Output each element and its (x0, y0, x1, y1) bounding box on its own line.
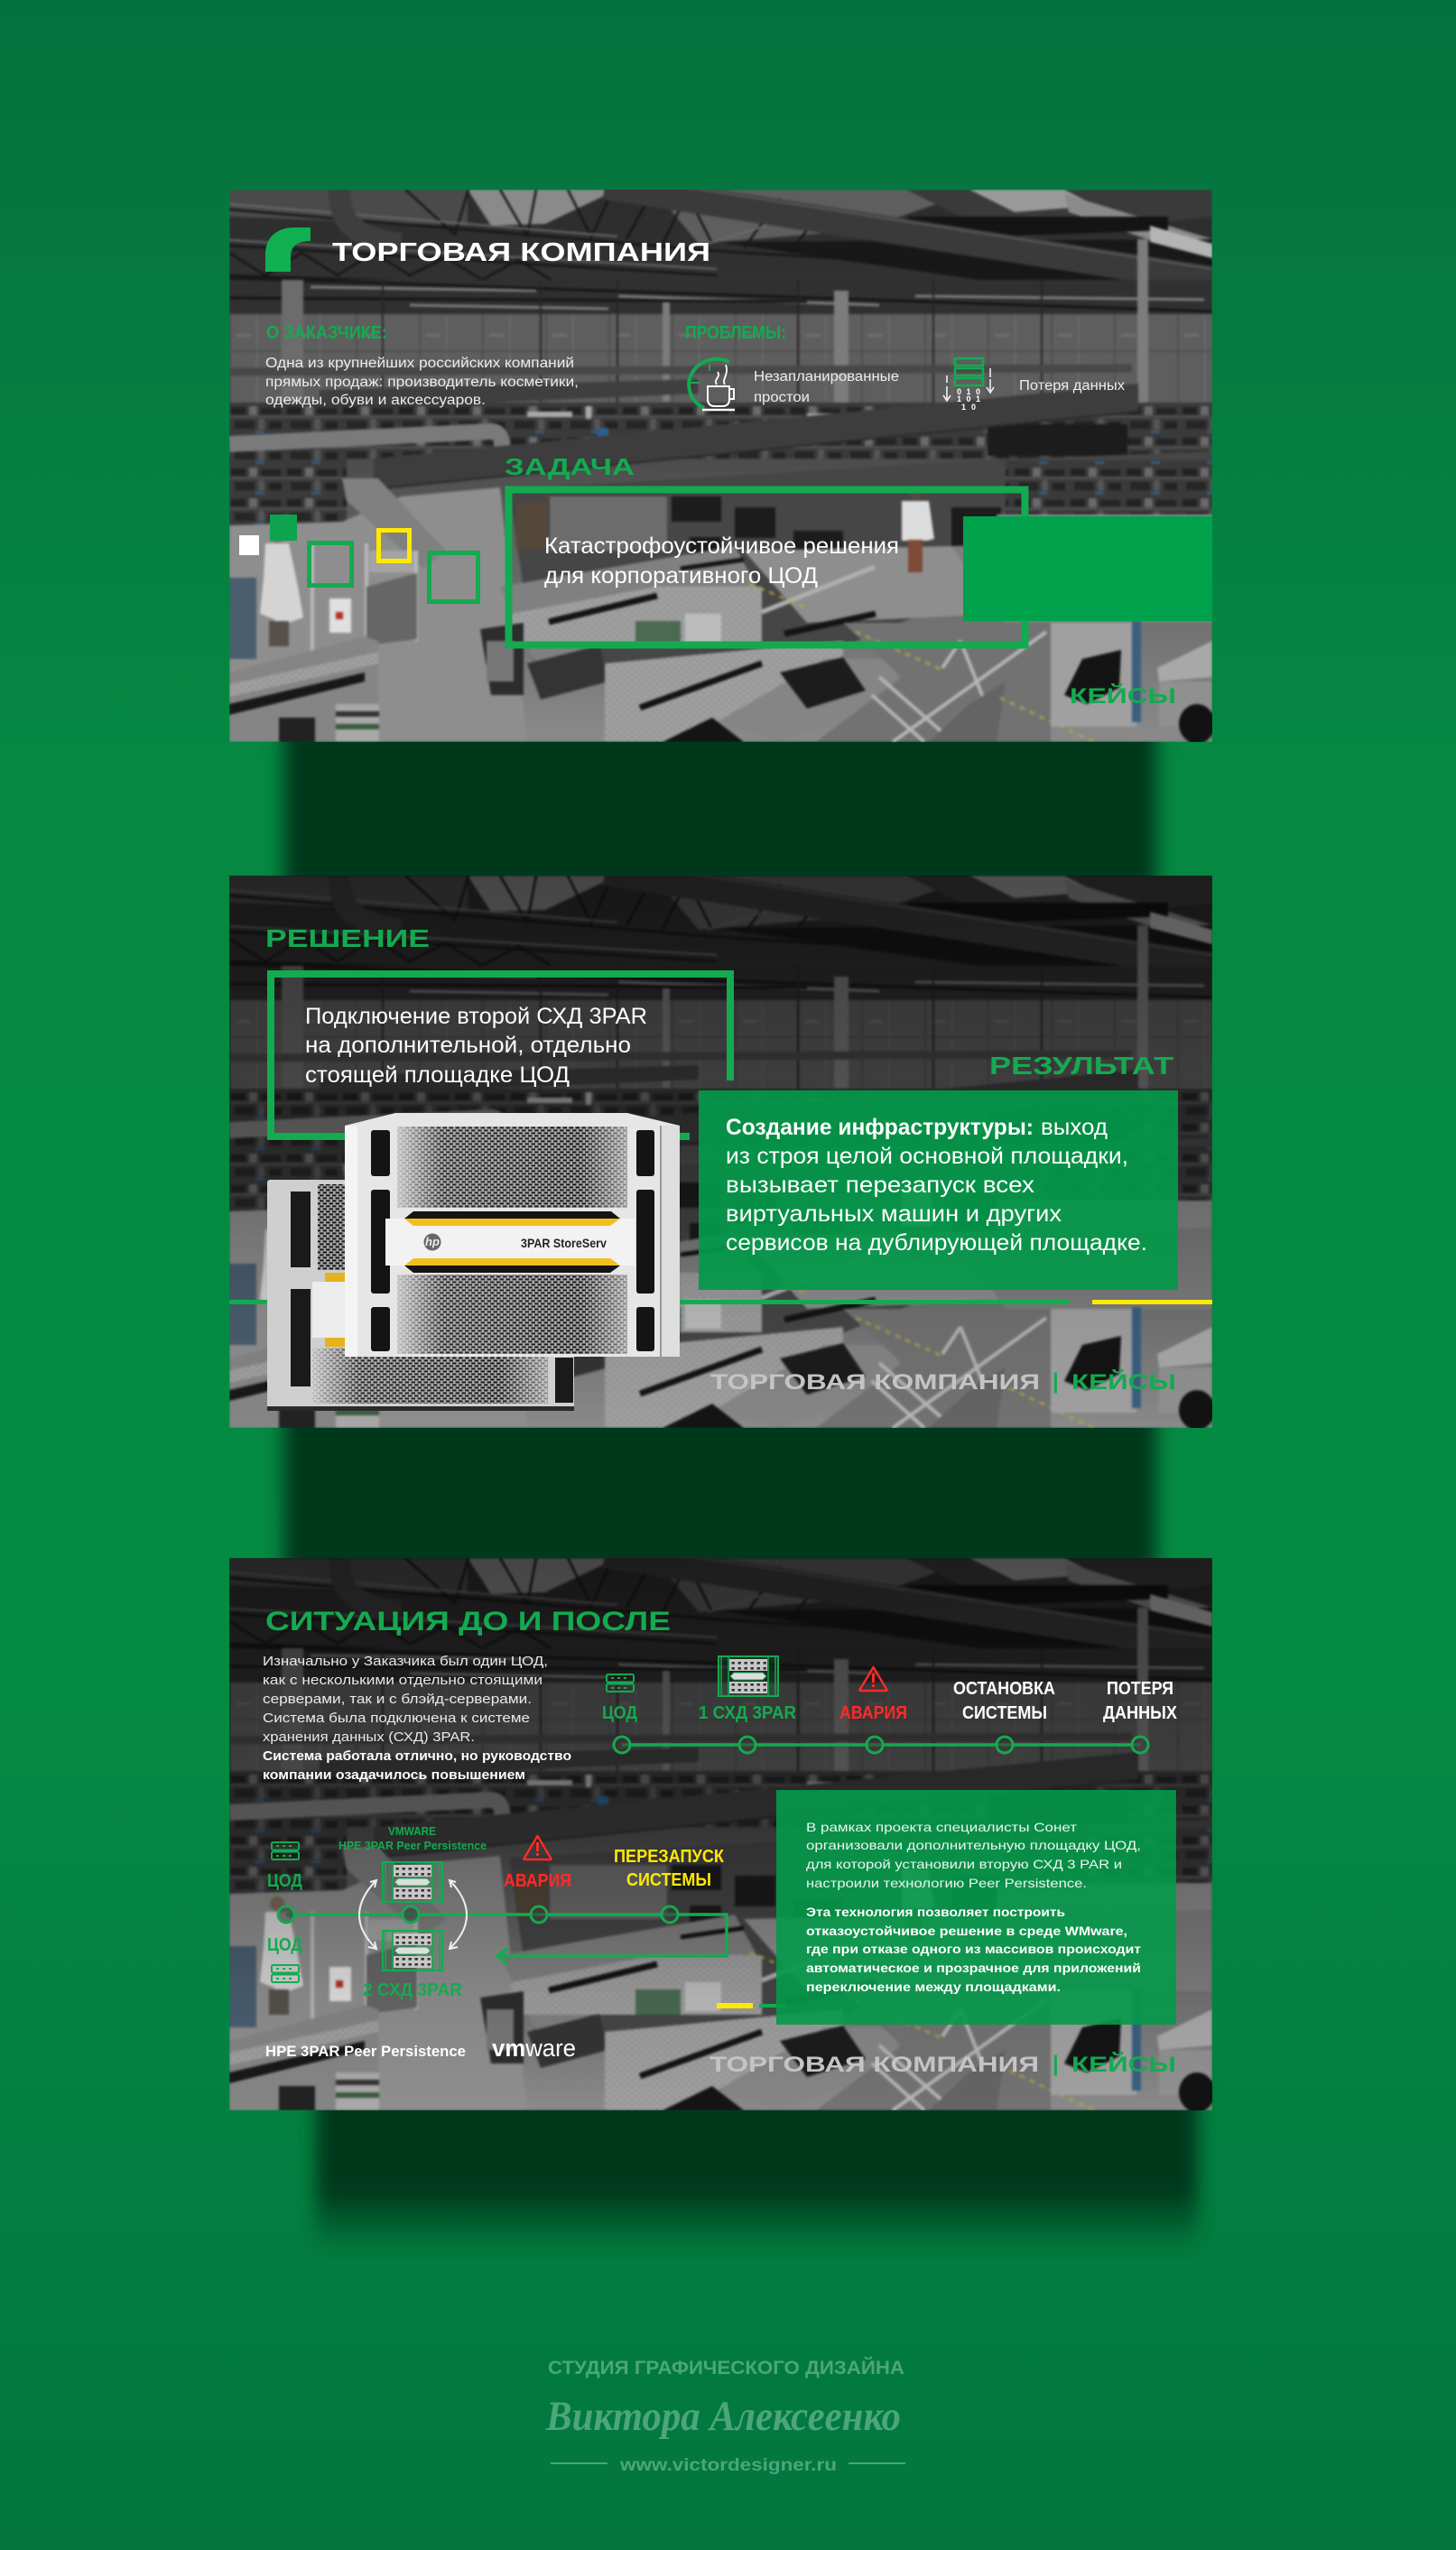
icon: data center top (272, 1842, 299, 1859)
title: ТОРГОВАЯ КОМПАНИЯ (332, 238, 710, 267)
credit: right rule (849, 2462, 905, 2464)
text block: situation: компании озадачилось повышением (263, 1767, 525, 1783)
footer tag: КЕЙСЫ (1071, 1369, 1176, 1395)
icon: storage bottom (383, 1931, 442, 1970)
panel: slide 2 solution and result (229, 861, 1215, 1430)
heading: result: РЕЗУЛЬТАТ (989, 1052, 1173, 1080)
label: restart: СИСТЕМЫ (626, 1870, 711, 1890)
icon: clock and coffee (689, 359, 735, 410)
text: solution: Подключение второй СХД 3PAR (305, 1004, 647, 1029)
footer tag (709, 2052, 1176, 2077)
icon: data loss (943, 358, 994, 412)
icon: data loss: 010 (957, 387, 980, 396)
icon: warning (859, 1667, 887, 1691)
text: solution: стоящей площадке ЦОД (305, 1062, 570, 1088)
credit: designer name: Виктора Алексеенко (545, 2393, 901, 2440)
yellow accent (717, 2003, 753, 2008)
text block: situation: Изначально у Заказчика был один ЦОД, (263, 1654, 548, 1669)
label: vmware peer persistence: VMWARE (388, 1825, 436, 1838)
solution frame (271, 974, 730, 1136)
task frame (509, 489, 1025, 644)
icon: company logo (265, 227, 311, 272)
text: task: Катастрофоустойчивое решения (544, 533, 899, 559)
text: project: В рамках проекта специалисты Сонет (806, 1820, 1078, 1834)
footer tag (710, 1369, 1176, 1395)
text block: situation: хранения данных (СХД) 3PAR. (263, 1729, 475, 1745)
text: data loss: Потеря данных (1019, 378, 1125, 394)
footer tag: КЕЙСЫ (1070, 683, 1176, 709)
label: vmware peer persistence (338, 1825, 487, 1852)
text: task (544, 533, 899, 589)
slide shadows (283, 722, 1198, 2252)
text: project: организовали дополнительную площадку ЦОД, (806, 1838, 1141, 1852)
panel: slide 1 company and task (229, 175, 1215, 744)
footer tag: | (1053, 2052, 1059, 2076)
text block: about client: Одна из крупнейших российских компаний (265, 356, 574, 371)
footer tag: ТОРГОВАЯ КОМПАНИЯ (710, 1370, 1040, 1395)
logo text: peer persistence: HPE 3PAR Peer Persistence (265, 2043, 466, 2060)
label: vmware peer persistence: HPE 3PAR Peer Persistence (338, 1840, 487, 1852)
heading: solution: РЕШЕНИЕ (265, 924, 430, 952)
text: technology: отказоустойчивое решение в среде WMware, (806, 1924, 1127, 1938)
decorative squares (239, 515, 478, 601)
label: data loss: ПОТЕРЯ (1107, 1679, 1173, 1699)
text block: about client: прямых продаж: производитель косметики, (265, 375, 579, 390)
arrows: failover (359, 1880, 467, 1949)
text: technology: переключение между площадками. (806, 1980, 1061, 1994)
icon: warning (524, 1836, 552, 1859)
label: data center: ЦОД (602, 1703, 637, 1723)
hp logo (424, 1233, 441, 1251)
text: unplanned downtime (754, 369, 899, 405)
text: task: для корпоративного ЦОД (544, 563, 818, 589)
icon: storage top (383, 1862, 442, 1902)
info box (776, 1790, 1176, 2025)
text: result: выход (1041, 1115, 1108, 1140)
footer tag: ТОРГОВАЯ КОМПАНИЯ (709, 2053, 1039, 2077)
panel: slide 3 before and after (229, 1544, 1215, 2112)
text: result: сервисов на дублирующей площадке. (726, 1230, 1147, 1256)
text block: about client (265, 356, 579, 408)
text block: situation: Система была подключена к системе (263, 1711, 530, 1726)
label: storage 1: 1 СХД 3PAR (699, 1703, 797, 1723)
server main unit (345, 1113, 680, 1357)
text: result: виртуальных машин и других (726, 1201, 1062, 1227)
result box (699, 1090, 1178, 1290)
icon: data center (607, 1674, 634, 1692)
text: result: из строя целой основной площадки, (726, 1144, 1128, 1169)
green accent (759, 2004, 786, 2008)
label: failure: АВАРИЯ (504, 1871, 571, 1891)
label: failure: АВАРИЯ (839, 1703, 907, 1723)
server back unit (267, 1180, 574, 1411)
text: technology (806, 1905, 1141, 1994)
divider green (229, 1300, 1070, 1304)
label: data loss (1103, 1679, 1178, 1723)
text block: situation: как с несколькими отдельно стоящими (263, 1673, 543, 1688)
text: unplanned downtime: простои (754, 390, 810, 405)
heading: problems: ПРОБЛЕМЫ: (685, 323, 786, 343)
timeline: before (602, 1656, 1178, 1753)
text: result (726, 1115, 1147, 1256)
label: storage 2: 2 СХД 3PAR (363, 1980, 463, 2000)
label: data loss: ДАННЫХ (1103, 1703, 1178, 1723)
heading: before and after: СИТУАЦИЯ ДО И ПОСЛЕ (265, 1607, 671, 1637)
heading: about client: О ЗАКАЗЧИКЕ: (266, 323, 387, 343)
text block: situation: серверами, так и с блэйд-серверами. (263, 1692, 532, 1707)
label: system stop: СИСТЕМЫ (962, 1703, 1047, 1723)
text: project: для которой установили вторую СХД 3 PAR и (806, 1857, 1122, 1871)
text block: about client: одежды, обуви и аксессуаров. (265, 393, 486, 408)
label: restart: ПЕРЕЗАПУСК (614, 1847, 725, 1867)
label: restart (614, 1847, 725, 1890)
label: data center bottom: ЦОД (267, 1935, 302, 1955)
divider yellow (1092, 1300, 1212, 1304)
text: result: Создание инфраструктуры: (726, 1115, 1034, 1140)
text: solution (305, 1004, 647, 1088)
hp logo: hp (425, 1235, 440, 1248)
text: technology: где при отказе одного из массивов происходит (806, 1942, 1141, 1956)
text block: situation: Система работала отлично, но руководство (263, 1748, 571, 1764)
credit: website: www.victordesigner.ru (619, 2456, 837, 2475)
text: project (806, 1820, 1141, 1890)
text: unplanned downtime: Незапланированные (754, 369, 899, 385)
heading: task: ЗАДАЧА (505, 453, 635, 480)
credit: studio line: СТУДИЯ ГРАФИЧЕСКОГО ДИЗАЙНА (548, 2357, 904, 2378)
text: technology: Эта технология позволяет построить (806, 1905, 1065, 1919)
icon: data loss: 101 (957, 394, 980, 403)
text block: situation (263, 1654, 571, 1783)
solid green block (963, 516, 1212, 621)
icon: data loss: 10 (961, 403, 976, 412)
timeline: after (267, 1825, 727, 2000)
icon: data center bottom (272, 1965, 299, 1982)
footer tag: | (1053, 1369, 1059, 1394)
text: result: вызывает перезапуск всех (726, 1173, 1035, 1198)
logo: vmware: vmware (492, 2035, 576, 2062)
text: project: настроили технологию Peer Persistence. (806, 1876, 1087, 1890)
icon: storage array (719, 1656, 778, 1696)
footer tag: КЕЙСЫ (1071, 2052, 1176, 2077)
label: system stop: ОСТАНОВКА (953, 1679, 1055, 1699)
label: data center top: ЦОД (267, 1871, 302, 1891)
text: technology: автоматическое и прозрачное для приложений (806, 1961, 1141, 1975)
product label: 3PAR StoreServ (521, 1236, 607, 1250)
studio credit (545, 2357, 905, 2475)
text: solution: на дополнительной, отдельно (305, 1033, 631, 1058)
label: system stop (953, 1679, 1055, 1723)
credit: left rule (551, 2462, 607, 2464)
